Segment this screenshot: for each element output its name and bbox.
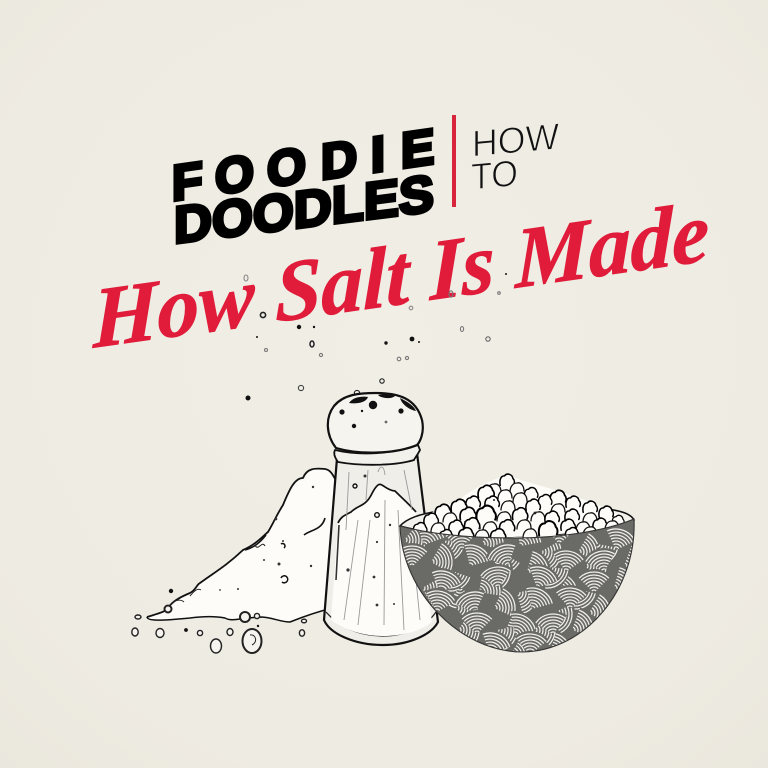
bowl of salt	[398, 473, 635, 652]
shaker collar	[334, 445, 420, 465]
glass reflections	[344, 467, 420, 630]
label word: TO: TO	[471, 151, 518, 198]
salt shaker	[324, 393, 438, 645]
logo word: FOODIE: FOODIE	[172, 119, 434, 212]
shaker dome lid	[328, 393, 423, 453]
shaker inner base line	[326, 612, 436, 636]
label: How To	[471, 115, 559, 198]
woven bowl body	[400, 520, 634, 652]
loose salt crystals	[132, 589, 306, 653]
label word: HOW: HOW	[472, 115, 559, 165]
title: How Salt Is Made	[92, 183, 709, 367]
logo: Foodie Doodles	[172, 119, 434, 255]
logo word: DOODLES: DOODLES	[174, 165, 434, 255]
salt crystals in bowl	[413, 474, 628, 542]
falling salt specks	[244, 273, 507, 400]
red divider	[452, 115, 456, 207]
dome holes	[339, 394, 416, 428]
salt pile	[146, 469, 338, 622]
salt inside shaker	[331, 484, 432, 636]
bowl outline	[400, 519, 634, 652]
bowl rim back	[400, 508, 634, 536]
shaker glass body	[324, 453, 438, 645]
